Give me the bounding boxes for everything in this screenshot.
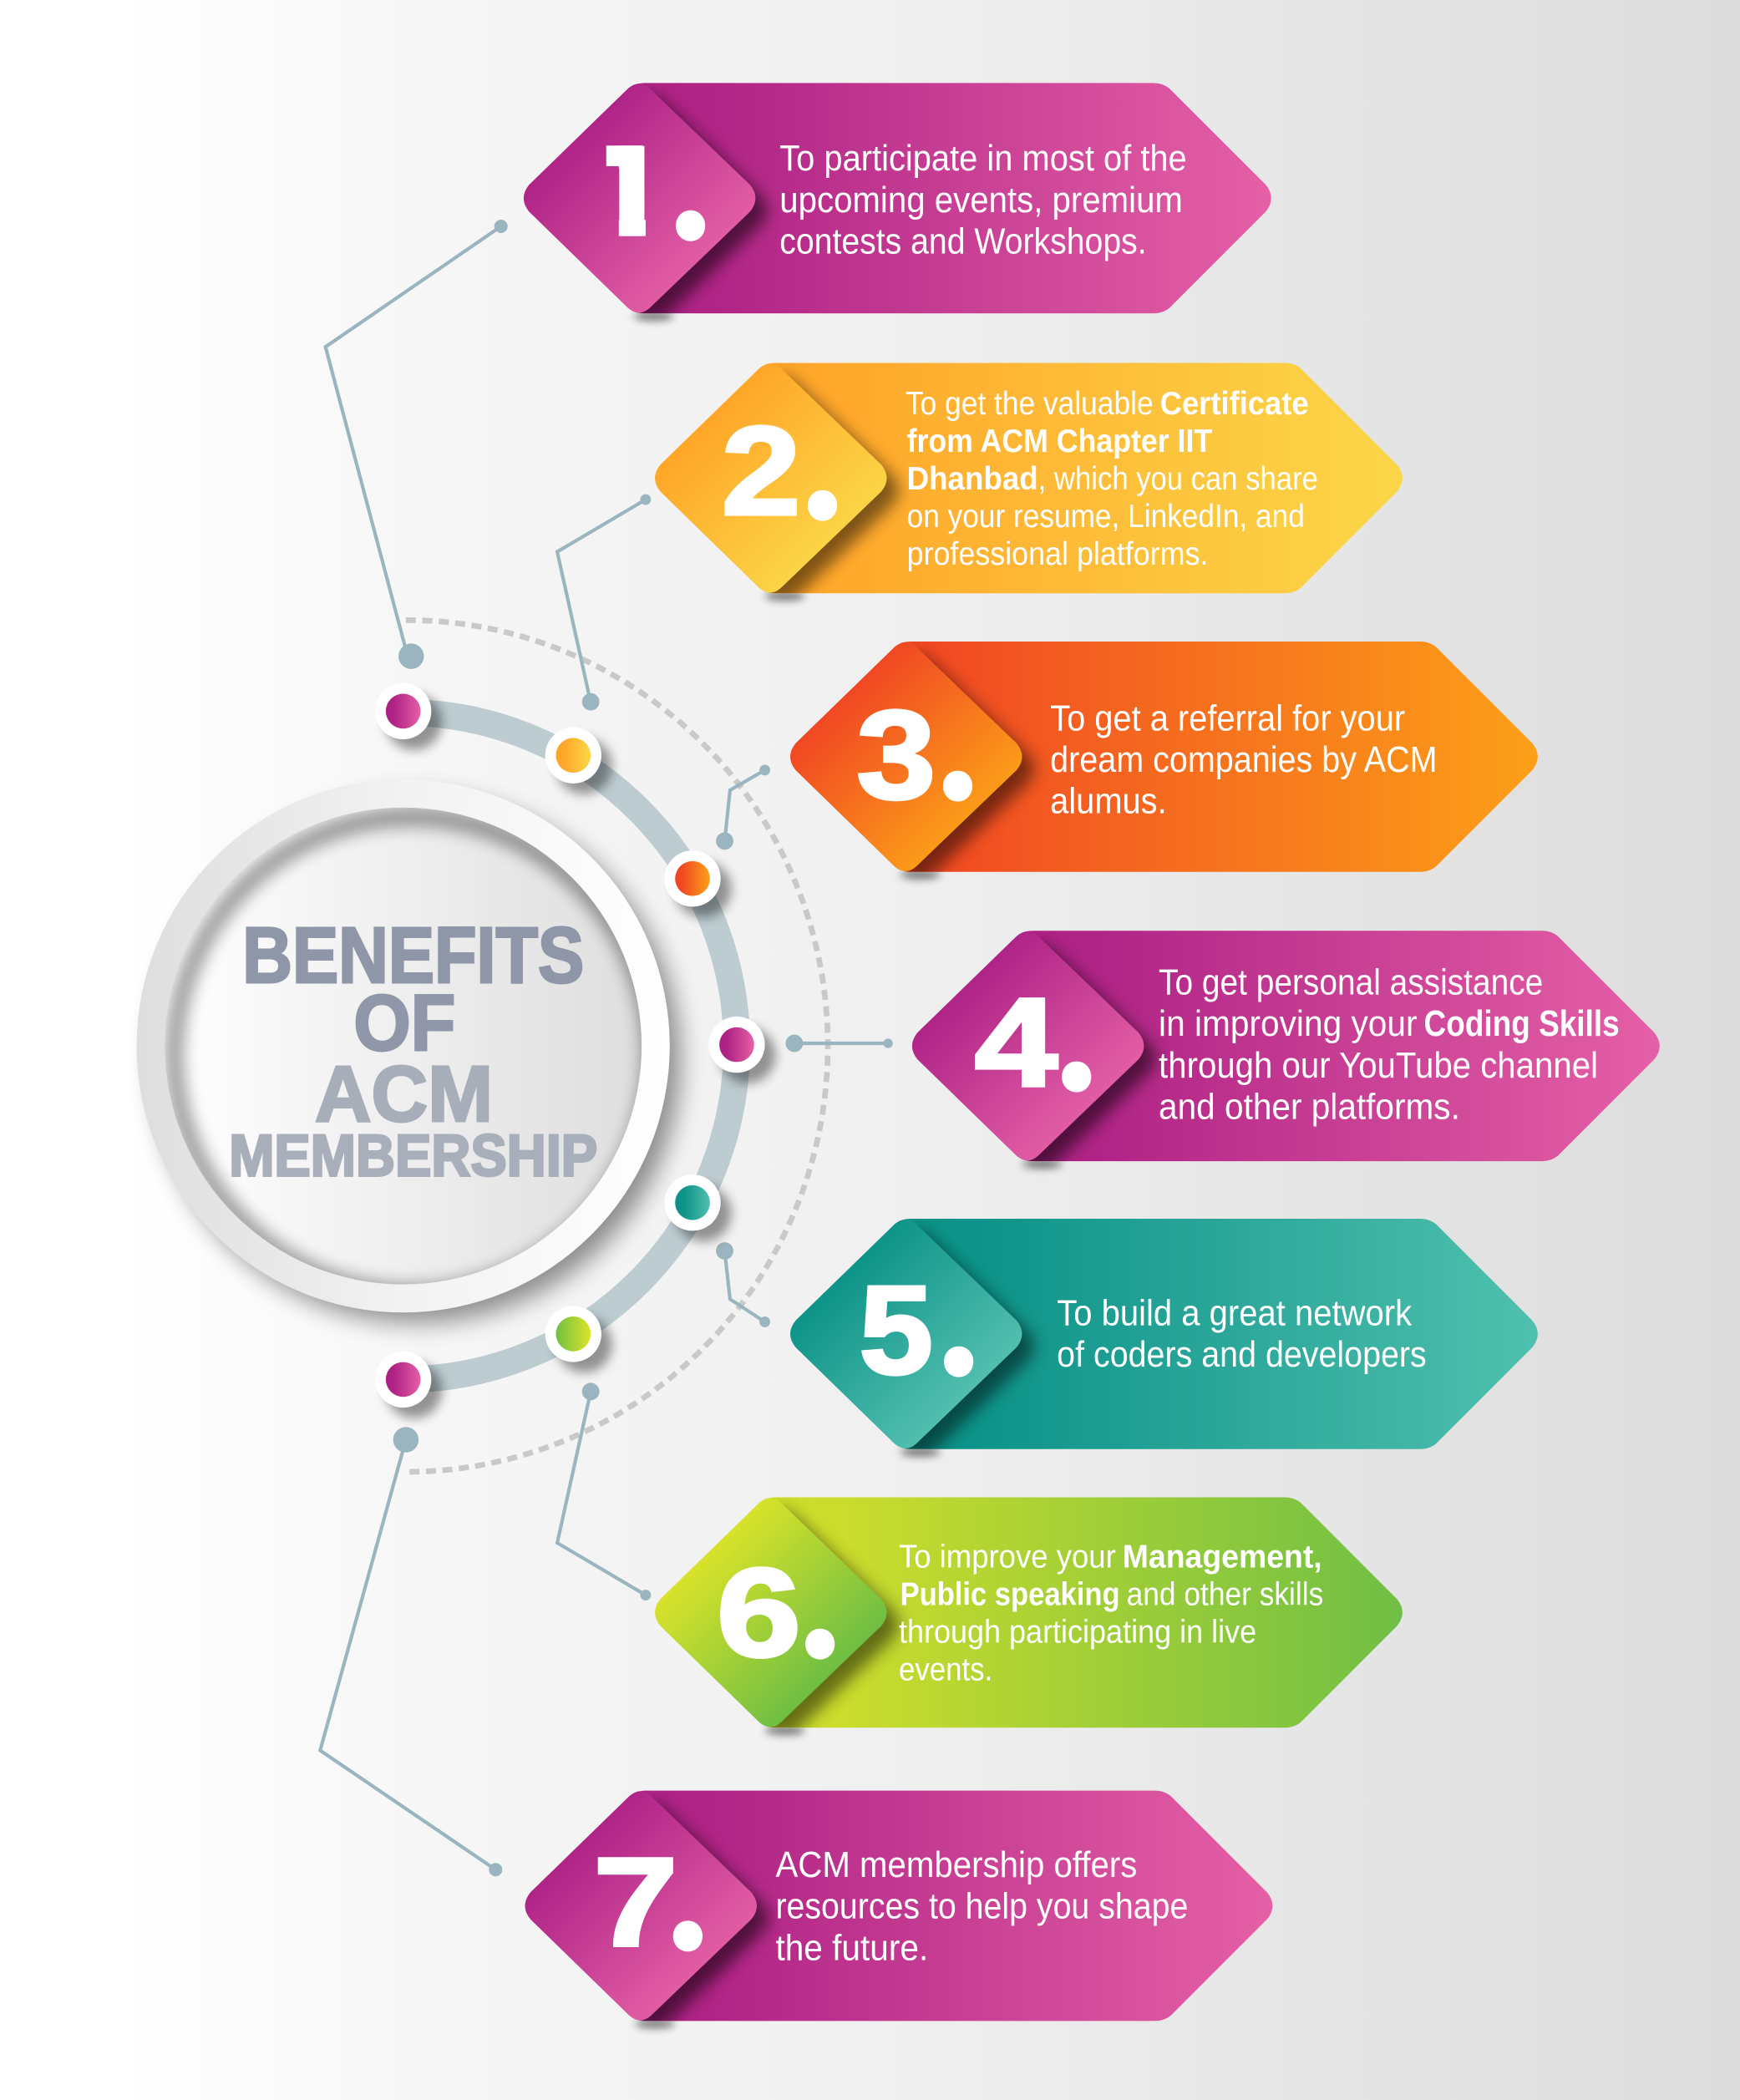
text 4: through our YouTube channel bbox=[1159, 1046, 1598, 1086]
number 3: . bbox=[931, 614, 984, 846]
text 2: on your resume, LinkedIn, and bbox=[907, 498, 1305, 535]
node 1 bbox=[375, 683, 442, 750]
number 3: 3 bbox=[856, 685, 936, 825]
title: MEMBERSHIP bbox=[229, 1123, 597, 1189]
node 3 bbox=[664, 850, 732, 917]
text 4: Coding Skills bbox=[1424, 1004, 1620, 1044]
text 1: To participate in most of the bbox=[779, 139, 1187, 179]
number 1: 1 bbox=[596, 121, 666, 261]
number 4: . bbox=[1050, 905, 1103, 1137]
connector 6 bbox=[557, 1382, 651, 1600]
timeline arc with nodes bbox=[375, 683, 775, 1418]
connector 5 bbox=[716, 1242, 770, 1327]
banner 5 bbox=[790, 1219, 1538, 1462]
text 1: upcoming events, premium bbox=[779, 180, 1183, 221]
number 6: . bbox=[794, 1472, 846, 1704]
text 2: Certificate bbox=[1160, 385, 1309, 422]
text 6 bbox=[899, 1539, 1323, 1687]
text 2: To get the valuable bbox=[906, 385, 1154, 422]
text 3: To get a referral for your bbox=[1050, 698, 1405, 738]
connector 7 bbox=[320, 1427, 502, 1876]
text 6: events. bbox=[899, 1651, 992, 1687]
number 4 bbox=[975, 905, 1103, 1137]
number 1: . bbox=[664, 53, 717, 286]
number 6: 6 bbox=[717, 1543, 801, 1682]
number 3 bbox=[856, 614, 984, 846]
connector 2 bbox=[557, 495, 651, 711]
text 2: , which you can share bbox=[1038, 460, 1318, 497]
number 2: 2 bbox=[722, 401, 800, 541]
text 2: professional platforms. bbox=[907, 535, 1208, 572]
connector 3 bbox=[716, 764, 770, 850]
node 5 bbox=[664, 1174, 732, 1241]
text 4 bbox=[1159, 962, 1620, 1128]
text 4: To get personal assistance bbox=[1159, 962, 1543, 1002]
text 4: and other platforms. bbox=[1159, 1088, 1460, 1128]
banner 7 bbox=[525, 1764, 1272, 2032]
node 4 bbox=[708, 1017, 775, 1083]
text 7: ACM membership offers bbox=[775, 1845, 1137, 1885]
text 5: of coders and developers bbox=[1057, 1335, 1427, 1375]
banner 4 bbox=[912, 905, 1660, 1173]
text 2: from ACM Chapter IIT bbox=[907, 423, 1212, 459]
number 2 bbox=[722, 333, 849, 566]
text 6: To improve your bbox=[899, 1539, 1116, 1575]
title bbox=[229, 911, 597, 1189]
text 7: resources to help you shape bbox=[775, 1887, 1188, 1927]
number 5 bbox=[860, 1189, 985, 1422]
number 5: 5 bbox=[860, 1260, 933, 1400]
number 1 bbox=[606, 145, 705, 241]
text 2: Dhanbad bbox=[907, 460, 1038, 497]
connector 1 bbox=[326, 220, 508, 669]
text 7: the future. bbox=[775, 1928, 928, 1968]
text 3: alumus. bbox=[1050, 782, 1167, 822]
node 7 bbox=[375, 1352, 442, 1418]
title: OF bbox=[353, 979, 455, 1068]
text 6: through participating in live bbox=[899, 1613, 1256, 1650]
number 5: . bbox=[932, 1189, 985, 1422]
text 5 bbox=[1057, 1293, 1427, 1375]
text 6: Management, bbox=[1123, 1539, 1322, 1575]
banner 6 bbox=[655, 1472, 1403, 1739]
text 1: contests and Workshops. bbox=[779, 221, 1147, 261]
number 7: . bbox=[662, 1764, 714, 1996]
text 3 bbox=[1050, 698, 1438, 822]
node 6 bbox=[545, 1306, 612, 1372]
text 3: dream companies by ACM bbox=[1050, 740, 1438, 780]
text 2 bbox=[906, 385, 1318, 572]
title: BENEFITS bbox=[242, 911, 584, 1000]
text 4: in improving your bbox=[1159, 1004, 1418, 1044]
text 7 bbox=[775, 1845, 1188, 1968]
text 5: To build a great network bbox=[1057, 1293, 1412, 1333]
node 2 bbox=[545, 728, 612, 794]
number 2: . bbox=[796, 333, 849, 566]
title: ACM bbox=[315, 1050, 493, 1139]
text 1 bbox=[779, 139, 1187, 261]
number 6 bbox=[717, 1472, 846, 1704]
banner 2 bbox=[655, 363, 1403, 606]
number 7 bbox=[593, 1764, 714, 1996]
central circle bbox=[137, 779, 681, 1323]
number 7: 7 bbox=[593, 1832, 677, 1972]
connector 4 bbox=[785, 1035, 893, 1052]
banner 3 bbox=[790, 614, 1538, 883]
text 6: and other skills bbox=[1127, 1576, 1323, 1613]
number 4: 4 bbox=[975, 972, 1058, 1113]
text 6: Public speaking bbox=[900, 1576, 1120, 1613]
dashed arc bbox=[406, 620, 828, 1472]
banner 1 bbox=[523, 83, 1271, 327]
